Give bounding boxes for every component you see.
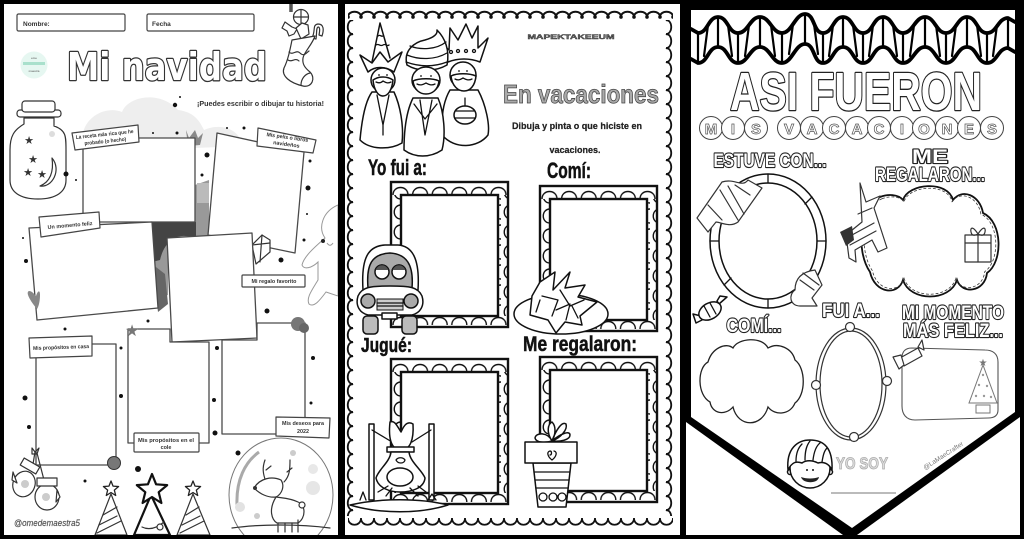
king right bbox=[438, 24, 489, 146]
icon: star jar: ★ bbox=[24, 135, 34, 147]
instruction text: Dibuja y pinta o que hiciste en bbox=[512, 121, 642, 132]
scalloped border bbox=[346, 10, 673, 527]
icon: stocking bbox=[282, 0, 323, 86]
subtitle: mis vacaciones: E bbox=[964, 121, 974, 138]
frame: la receta bbox=[72, 125, 195, 222]
icon: mitten bbox=[791, 270, 822, 306]
garland bbox=[691, 14, 1015, 63]
icon: christmas tree: ★ bbox=[979, 358, 988, 369]
icon: party trees bbox=[95, 474, 210, 535]
ring frame bbox=[710, 174, 826, 308]
name field: Nombre: bbox=[23, 21, 50, 28]
title: En vacaciones: En vacaciones bbox=[503, 79, 659, 109]
subtitle: mis vacaciones bbox=[700, 116, 1004, 140]
frame: mis propositos en el cole: Mis propósitos en el bbox=[138, 438, 195, 444]
frame: yo fui a bbox=[391, 182, 508, 328]
heading: mi momento mas feliz: MI MOMENTO bbox=[902, 303, 1004, 324]
handle: omedemaestra5: @omedemaestra5 bbox=[14, 518, 81, 529]
small scrambled heading: MAPEKTAKEEUM bbox=[528, 34, 614, 41]
panel: En vacaciones worksheet bbox=[345, 4, 680, 535]
subtitle: mis vacaciones: N bbox=[942, 121, 952, 138]
frame: mi regalo favorito: Mi regalo favorito bbox=[252, 279, 297, 285]
frame: jugue bbox=[391, 359, 508, 505]
frame: un momento feliz: Un momento feliz bbox=[47, 221, 93, 231]
icon: scarf bbox=[697, 180, 762, 232]
background cloud bbox=[82, 97, 243, 148]
frame: pelis o libros bbox=[208, 128, 316, 253]
date field bbox=[147, 14, 254, 31]
heading: me regalaron: REGALARON... bbox=[875, 165, 985, 186]
frame: mis propositos en el cole bbox=[125, 323, 209, 452]
frame: mis propositos en casa: Mis propósitos en casa bbox=[33, 344, 90, 352]
icon: three kings bbox=[360, 23, 489, 156]
heading: Me regalaron: Me regalaron: bbox=[523, 333, 637, 356]
instruction text bbox=[512, 121, 642, 156]
heading: me regalaron bbox=[875, 147, 985, 186]
lower corner right bbox=[857, 417, 1020, 535]
subtitle: mis vacaciones: C bbox=[829, 121, 840, 138]
instruction text: vacaciones. bbox=[550, 145, 600, 156]
icon: star jar bbox=[10, 101, 66, 199]
heading: comi: COMÍ... bbox=[726, 315, 782, 337]
subtitle: mis vacaciones: A bbox=[807, 121, 818, 138]
icon: boy face bbox=[788, 440, 832, 488]
subtitle: mis vacaciones: S bbox=[987, 121, 997, 138]
icon: gift box bbox=[965, 228, 991, 262]
note: puedes escribir: ¡Puedes escribir o dibujar tu historia! bbox=[197, 99, 324, 108]
subtitle: mis vacaciones: S bbox=[751, 121, 761, 138]
gray rainbow bbox=[152, 130, 209, 312]
frame: mi regalo favorito bbox=[167, 233, 305, 342]
rounded frame: momento feliz bbox=[902, 348, 998, 420]
icon: reindeer snow globe bbox=[229, 438, 333, 539]
sparkles bbox=[22, 96, 315, 482]
frame: pelis o libros: Mis pelis o libros bbox=[266, 132, 308, 144]
frame: pelis o libros: navideños bbox=[273, 140, 300, 150]
panel: Asi fueron pennant bbox=[686, 10, 1020, 535]
frame: mis deseos para 2022: Mis deseos para bbox=[282, 421, 325, 427]
frame: la receta: probado (o hecho) bbox=[84, 137, 127, 147]
heading: mi momento mas feliz: MÁS FELIZ... bbox=[903, 320, 1003, 342]
icon: heart bbox=[28, 291, 40, 309]
icon: car bbox=[357, 245, 423, 334]
name field bbox=[17, 14, 125, 31]
heading: Yo fui a: Yo fui a: bbox=[368, 155, 427, 180]
heading: estuve con: ESTUVE CON... bbox=[714, 151, 826, 172]
oval frame: fui a bbox=[812, 322, 892, 442]
heading: fui a: FUI A... bbox=[822, 301, 880, 322]
frame: mis propositos en el cole: cole bbox=[161, 445, 171, 451]
logo badge bbox=[20, 52, 48, 78]
lower corner left bbox=[686, 422, 843, 535]
panel: Mi navidad worksheet bbox=[4, 0, 338, 539]
heading: Comi: Comí: bbox=[547, 158, 591, 183]
icon: candy left bbox=[693, 296, 727, 324]
king left bbox=[360, 23, 403, 148]
subtitle: mis vacaciones: C bbox=[874, 121, 885, 138]
frame: mis deseos para 2022 bbox=[222, 317, 330, 438]
icon: star jar: ★ bbox=[23, 167, 33, 179]
icon: star jar: ★ bbox=[37, 169, 47, 181]
frame: mis deseos para 2022: 2022 bbox=[297, 429, 309, 435]
frame: me regalaron bbox=[540, 357, 657, 503]
icon: candy right bbox=[893, 340, 924, 369]
frame: mis propositos en el cole: ★ bbox=[125, 323, 139, 340]
icon: mittens bbox=[9, 448, 60, 510]
cloud frame: comi bbox=[700, 340, 803, 423]
logo badge: eme bbox=[31, 56, 37, 60]
date field: Fecha bbox=[152, 21, 171, 28]
icon: diamond bbox=[252, 235, 270, 264]
icon: gingerbread figure bbox=[302, 205, 338, 305]
frame: un momento feliz bbox=[29, 212, 158, 320]
king center bbox=[404, 30, 448, 156]
icon: nachos plate bbox=[514, 272, 608, 334]
subtitle: mis vacaciones: I bbox=[900, 121, 904, 138]
frame: comi bbox=[540, 186, 657, 332]
subtitle: mis vacaciones: I bbox=[731, 121, 735, 138]
subtitle: mis vacaciones: O bbox=[918, 121, 930, 138]
name line bbox=[831, 492, 896, 494]
icon: child on swing bbox=[350, 422, 448, 512]
icon: christmas tree bbox=[969, 358, 997, 413]
text: yo soy: YO SOY bbox=[836, 454, 889, 473]
subtitle: mis vacaciones: V bbox=[784, 121, 794, 138]
heading: mi momento mas feliz bbox=[902, 303, 1004, 342]
watermark handle: @LaMaeCrafter bbox=[922, 440, 966, 472]
icon: star jar: ★ bbox=[28, 154, 38, 166]
subtitle: mis vacaciones: M bbox=[705, 121, 717, 138]
title: Mi navidad: Mi navidad bbox=[67, 45, 267, 89]
heading: Jugue: Jugué: bbox=[361, 335, 412, 357]
logo badge: maestra bbox=[29, 69, 40, 73]
frame: mis propositos en casa bbox=[29, 336, 120, 470]
subtitle: mis vacaciones: A bbox=[852, 121, 863, 138]
cloud frame: me regalaron bbox=[861, 186, 999, 296]
frame: la receta: La receta más rica que he bbox=[76, 129, 134, 141]
heading: me regalaron: ME bbox=[912, 147, 948, 168]
icon: pinata bbox=[840, 183, 887, 262]
icon: gift pot bbox=[525, 422, 577, 507]
